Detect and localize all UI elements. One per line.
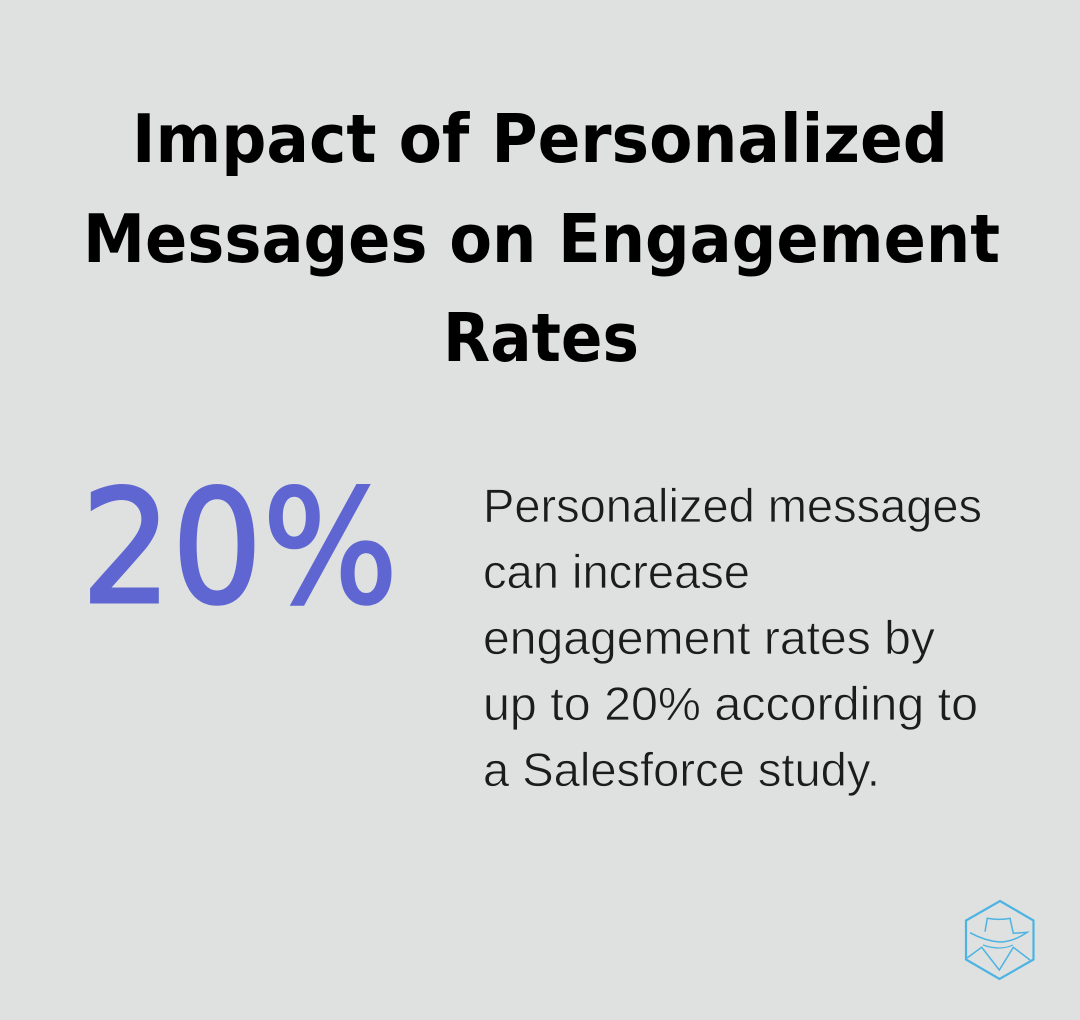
description text: a Salesforce study. (483, 743, 880, 796)
description text: up to 20% according to (483, 677, 978, 730)
description text: engagement rates by (483, 611, 935, 664)
title: Messages on Engagement (83, 200, 1000, 278)
icon: hexagon logo with hat and suit (966, 901, 1034, 979)
description text: Personalized messages (483, 479, 982, 532)
title (83, 100, 1000, 377)
description text (483, 479, 982, 796)
statistic: 20%: 20% (81, 457, 398, 640)
description text: can increase (483, 545, 750, 598)
title: Impact of Personalized (132, 100, 948, 178)
title: Rates (443, 299, 639, 377)
